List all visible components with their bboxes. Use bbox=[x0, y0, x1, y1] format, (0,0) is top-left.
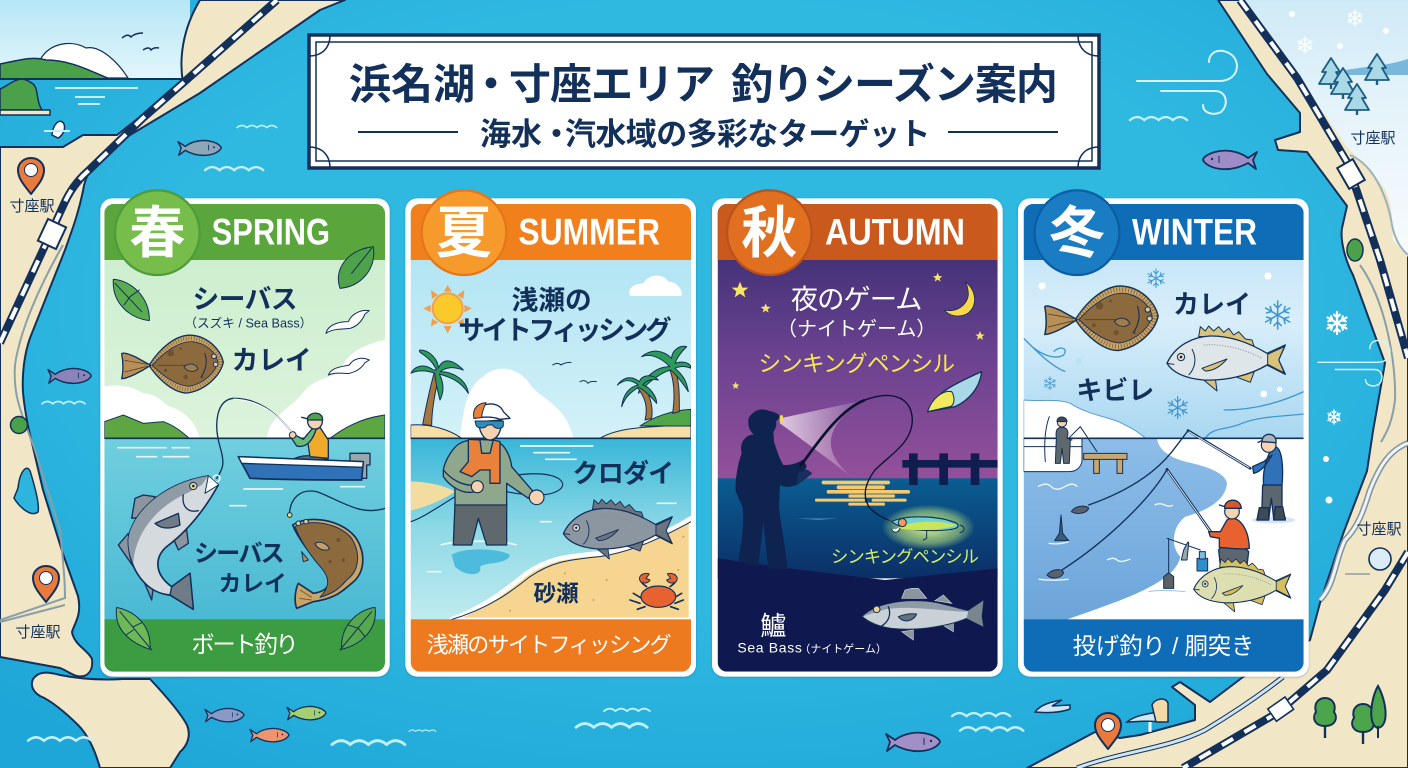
fly line bbox=[411, 474, 563, 522]
crab bbox=[630, 573, 683, 609]
left pier angler bbox=[1045, 417, 1097, 463]
rod and line bbox=[864, 394, 913, 522]
fishing rod and line bbox=[217, 398, 292, 478]
pier bbox=[902, 453, 998, 485]
header band bbox=[411, 204, 691, 260]
snow flakes bbox=[1043, 269, 1292, 419]
boat angler bbox=[238, 413, 370, 480]
label: station upper right: 寸座駅 bbox=[1350, 130, 1396, 147]
decorative fish and waves on sea bbox=[28, 117, 1257, 751]
footer band bbox=[104, 619, 385, 673]
subtitle text: 汽水域の多彩なターゲット bbox=[565, 117, 930, 152]
panel: spring bbox=[100, 190, 390, 677]
label: sinking pencil small: シンキングペンシル bbox=[831, 547, 979, 567]
lure glowing bbox=[882, 505, 975, 550]
footer label: boat fishing: ボート釣り bbox=[191, 632, 299, 658]
label: sea bass night game: Sea Bass bbox=[737, 640, 803, 656]
pier bbox=[1084, 453, 1127, 473]
map: right land with rail and winter area bbox=[1027, 0, 1408, 768]
moon reflection bbox=[815, 481, 910, 506]
label: sea bass: シーバス bbox=[192, 284, 297, 314]
leaf upper right bbox=[338, 247, 374, 288]
title text: 寸座エリア bbox=[509, 61, 714, 108]
footer label: sight fishing: 浅瀬のサイトフィッシング bbox=[427, 633, 672, 658]
seagulls bbox=[326, 310, 369, 375]
badge: summer bbox=[422, 190, 506, 275]
footer label: casting and rig: 投げ釣り / 胴突き bbox=[1073, 633, 1254, 659]
footer band bbox=[411, 619, 691, 673]
standing angler bbox=[1252, 434, 1295, 523]
header band bbox=[718, 204, 998, 260]
map: left land with rail bbox=[0, 0, 345, 768]
badge: winter bbox=[1035, 190, 1119, 275]
casting lines bbox=[1061, 431, 1208, 570]
badge: winter: 冬 bbox=[1049, 202, 1105, 265]
icons: wind and snow on sea bbox=[1137, 51, 1390, 504]
footer band bbox=[1024, 619, 1304, 673]
leaves footer bbox=[116, 607, 375, 650]
beach bbox=[450, 518, 691, 620]
flying lure bbox=[928, 372, 982, 412]
badge: summer: 夏 bbox=[436, 202, 492, 265]
heading: SPRING: SPRING bbox=[212, 211, 330, 253]
flounder hooked bbox=[293, 519, 363, 608]
sinkers and waves bbox=[1038, 484, 1173, 580]
label: sea bass night game: （ナイトゲーム） bbox=[799, 643, 887, 656]
subtitle text: 海水 bbox=[480, 117, 542, 152]
label: sea bass subtitle: （スズキ / Sea Bass） bbox=[184, 315, 312, 330]
label: kanji sea bass: 鱸 bbox=[760, 611, 786, 641]
label: sinking pencil: シンキングペンシル bbox=[758, 351, 955, 377]
palm trees bbox=[411, 346, 691, 426]
label: flounder: カレイ bbox=[232, 345, 312, 375]
heading: AUTUMN: AUTUMN bbox=[825, 211, 965, 253]
label: night game parenthesis: （ナイトゲーム） bbox=[777, 318, 936, 341]
label: night game: 夜のゲーム bbox=[791, 283, 922, 314]
flounder upper bbox=[122, 335, 223, 393]
subtitle text: ・ bbox=[541, 117, 572, 152]
panel: summer bbox=[405, 190, 696, 677]
label: shallows: 浅瀬の bbox=[512, 285, 592, 315]
night angler bbox=[736, 409, 807, 570]
yellow seabream bbox=[1194, 558, 1291, 612]
title text: ・ bbox=[470, 61, 512, 108]
label: black sea bream: クロダイ bbox=[572, 459, 674, 489]
title text: 浜名湖 bbox=[349, 61, 475, 108]
flounder bbox=[1045, 286, 1158, 350]
stars bbox=[732, 273, 985, 389]
heading: SUMMER: SUMMER bbox=[518, 211, 660, 253]
panel: winter bbox=[1018, 190, 1309, 677]
header band bbox=[1024, 204, 1304, 260]
label: kibire: キビレ bbox=[1076, 375, 1154, 405]
label: station lower left: 寸座駅 bbox=[15, 624, 61, 641]
label: station lower right: 寸座駅 bbox=[1356, 521, 1402, 538]
foreground ground bbox=[718, 558, 998, 672]
badge: autumn bbox=[727, 190, 812, 275]
icon: map pin bottom bbox=[1095, 713, 1121, 749]
autumn sea bass bbox=[862, 588, 983, 640]
title banner bbox=[309, 35, 1099, 168]
label: flounder: カレイ bbox=[1173, 289, 1251, 319]
icon: map pin left upper bbox=[18, 158, 44, 194]
silver seabream bbox=[1167, 326, 1285, 391]
label: sea bass lower: シーバス bbox=[194, 541, 285, 568]
icon: map pin left lower bbox=[33, 566, 59, 602]
label: flounder lower: カレイ bbox=[219, 571, 287, 597]
kneeling angler bbox=[1149, 500, 1249, 592]
header band bbox=[104, 204, 385, 260]
black sea bream bbox=[563, 499, 672, 559]
badge: spring: 春 bbox=[129, 202, 185, 265]
title text: 釣りシーズン案内 bbox=[731, 61, 1057, 108]
label: sandy shallows: 砂瀬 bbox=[533, 581, 579, 607]
heading: WINTER: WINTER bbox=[1132, 211, 1257, 253]
sun bbox=[423, 285, 472, 333]
harbor structure and boat bbox=[1035, 699, 1168, 732]
label: station upper left: 寸座駅 bbox=[9, 198, 55, 215]
light beam bbox=[780, 402, 858, 476]
wading angler bbox=[443, 403, 544, 545]
badge: autumn: 秋 bbox=[741, 202, 797, 265]
label: sight fishing: サイトフィッシング bbox=[458, 315, 672, 345]
map: top-left sky and bay bbox=[0, 0, 190, 138]
sea bass bbox=[118, 476, 218, 609]
badge: spring bbox=[115, 190, 200, 275]
panel: autumn bbox=[712, 190, 1003, 677]
moon bbox=[944, 282, 975, 316]
leaf upper left bbox=[113, 279, 149, 321]
